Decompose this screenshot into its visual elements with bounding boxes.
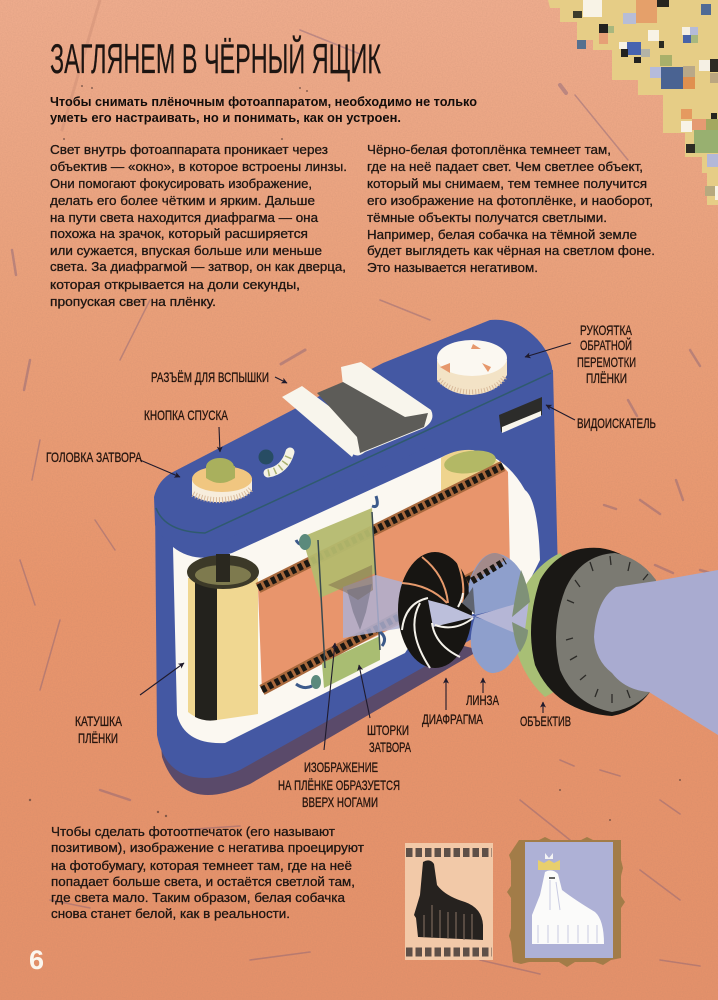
intro text: Чтобы снимать плёночным фотоаппаратом, необходимо не только: [50, 95, 477, 109]
negative film frame with black dog: [405, 843, 493, 960]
white slider: [268, 452, 290, 473]
label: shutter curtains: ШТОРКИ: [367, 722, 409, 738]
label: rewind crank: ПЕРЕМОТКИ: [577, 354, 636, 370]
shutter curtains: [296, 496, 385, 689]
camera body shadow: [157, 640, 480, 795]
intro text: [50, 95, 477, 125]
label: film spool: КАТУШКА: [75, 713, 122, 729]
label: rewind crank: ОБРАТНОЙ: [580, 336, 632, 353]
label: rewind crank: [577, 322, 636, 386]
diaphragm: [398, 552, 475, 668]
camera illustration: [154, 320, 718, 795]
light beam: [594, 570, 718, 735]
label: viewfinder: ВИДОИСКАТЕЛЬ: [577, 415, 656, 431]
shutter knob: [192, 458, 252, 502]
bottom text block: где света мало. Таким образом, белая собачка: [51, 891, 345, 905]
label: upside-down image: ВВЕРХ НОГАМИ: [302, 794, 378, 810]
flash shoe: [282, 362, 432, 457]
rewind dial: [437, 340, 507, 395]
label: diaphragm: ДИАФРАГМА: [422, 711, 483, 727]
bottom text block: позитивом), изображение с негатива проецируют: [51, 841, 364, 855]
label: upside-down image: НА ПЛЁНКЕ ОБРАЗУЕТСЯ: [278, 777, 400, 793]
text column left: которая открывается на доли секунды,: [50, 278, 300, 292]
intro text: уметь его настраивать, но и понимать, как он устроен.: [50, 111, 401, 125]
text column right: Чёрно-белая фотоплёнка темнеет там,: [367, 143, 611, 157]
bottom text block: Чтобы сделать фотоотпечаток (его называют: [51, 825, 335, 839]
projected image: [328, 565, 470, 638]
text column left: делать его более чётким и ярким. Дальше: [50, 194, 315, 208]
decorative pixel corner: [548, 0, 718, 205]
text column left: на пути света находится диафрагма — она: [50, 211, 318, 225]
text column right: Например, белая собачка на тёмной земле: [367, 228, 637, 242]
objective: [531, 548, 656, 716]
label: shutter dial: ГОЛОВКА ЗАТВОРА: [46, 449, 142, 465]
film strips: [258, 466, 505, 690]
text column left: объектив — «окно», в которое встроены линзы.: [50, 160, 347, 174]
label: film spool: [75, 713, 122, 746]
label: lens: ЛИНЗА: [466, 692, 499, 708]
label: rewind crank: ПЛЁНКИ: [586, 370, 627, 386]
orange window behind film: [258, 466, 510, 692]
text column right: который мы снимаем, тем темнее получится: [367, 177, 647, 191]
title: ЗАГЛЯНЕМ В ЧЁРНЫЙ ЯЩИК: [50, 34, 381, 82]
text column left: Свет внутрь фотоаппарата проникает через: [50, 143, 328, 157]
text column right: будет выглядеть как чёрная на светлом фоне.: [367, 244, 655, 258]
framed positive with white dog: [507, 837, 625, 967]
text column right: где на неё падает свет. Чем светлее объект,: [367, 160, 643, 174]
label: objective: ОБЪЕКТИВ: [520, 713, 571, 729]
top plate: [154, 320, 553, 548]
label: upside-down image: ИЗОБРАЖЕНИЕ: [304, 759, 378, 775]
dark dot: [258, 450, 274, 464]
text column left: похожа на зрачок, который расширяется: [50, 227, 308, 241]
film roll: [187, 554, 259, 721]
green ring behind lens: [511, 553, 575, 697]
text column left: пропуская свет на плёнку.: [50, 295, 216, 309]
bottom text block: на фотобумагу, которая темнеет там, где на неё: [51, 859, 352, 873]
bottom text block: снова станет белой, как в реальности.: [51, 907, 290, 921]
label: shutter curtains: [367, 722, 411, 755]
label: shutter button: КНОПКА СПУСКА: [144, 407, 228, 423]
yellow spot on frame: [441, 450, 503, 498]
camera body frame: [155, 370, 558, 778]
text column left: [50, 143, 347, 309]
label: upside-down image: [278, 759, 400, 810]
text column left: или сужается, впуская больше или меньше: [50, 244, 322, 258]
text column right: его изображение на фотоплёнке, и наоборот,: [367, 194, 653, 208]
bottom text block: [51, 825, 364, 921]
film over lens: [472, 561, 505, 581]
viewfinder: [499, 397, 542, 433]
label: shutter curtains: ЗАТВОРА: [369, 739, 411, 755]
label: film spool: ПЛЁНКИ: [78, 730, 118, 746]
text column right: [367, 143, 655, 275]
label: rewind crank: РУКОЯТКА: [580, 322, 632, 338]
bottom text block: попадает больше света, и остаётся светлой там,: [51, 875, 355, 889]
text column left: Они помогают фокусировать изображение,: [50, 177, 312, 191]
text column right: тёмные объекты получатся светлыми.: [367, 211, 607, 225]
lens: [462, 553, 530, 673]
white inner frame: [173, 450, 540, 743]
page number: 6: [29, 945, 44, 975]
text column right: Это называется негативом.: [367, 261, 538, 275]
text column left: света. За диафрагмой — затвор, он как дверца,: [50, 260, 346, 274]
arrows: [140, 343, 575, 750]
label: flash socket: РАЗЪЁМ ДЛЯ ВСПЫШКИ: [151, 369, 269, 385]
